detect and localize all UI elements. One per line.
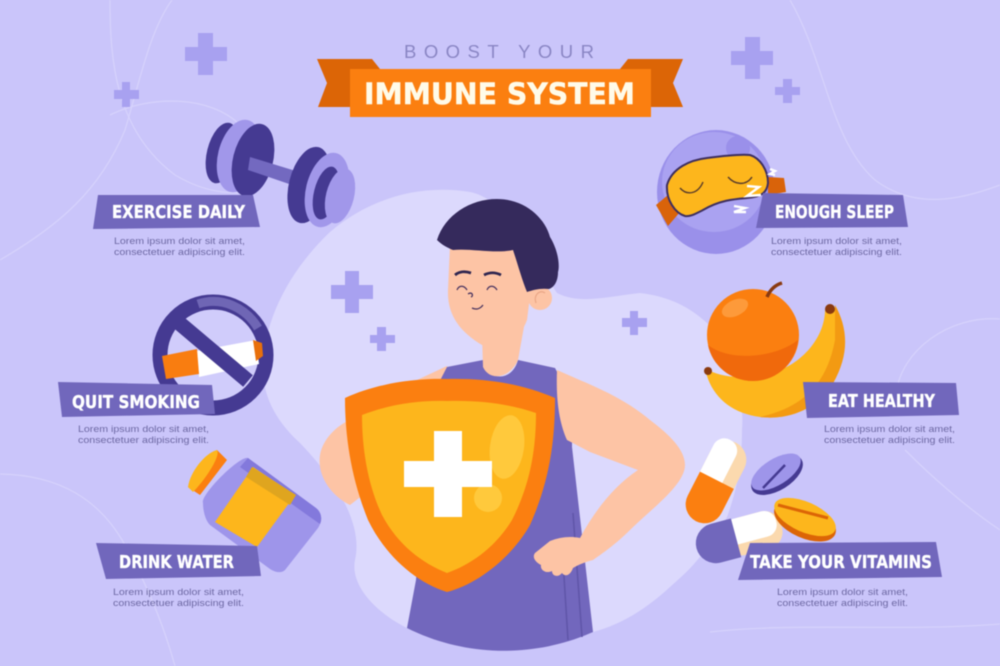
- icon: banana and orange: [704, 283, 845, 418]
- description: Lorem ipsum dolor sit amet,: [113, 586, 244, 597]
- ear: [528, 286, 552, 310]
- label banner: [803, 382, 959, 418]
- panel: take your vitamins: [738, 542, 942, 608]
- label banner: [96, 543, 261, 579]
- panel: exercise daily: [93, 195, 260, 257]
- heading: immune system: IMMUNE SYSTEM: [364, 77, 635, 111]
- description: Lorem ipsum dolor sit amet,: [824, 423, 955, 434]
- icon: water bottle: [188, 450, 321, 572]
- icon: no smoking: [160, 301, 266, 408]
- description: consectetuer adipiscing elit.: [114, 246, 245, 257]
- description: [78, 423, 209, 445]
- panel: eat healthy: [803, 382, 959, 445]
- description: [114, 235, 245, 257]
- shield face: [362, 401, 536, 573]
- ribbon band: [350, 69, 651, 117]
- label banner: [58, 382, 215, 417]
- shield cross: [404, 431, 492, 517]
- label banner: [93, 195, 260, 229]
- description: [771, 235, 902, 257]
- left arm: [320, 366, 460, 505]
- icon: vitamin pills: [679, 434, 842, 568]
- shield rim: [345, 379, 555, 592]
- description: consectetuer adipiscing elit.: [824, 434, 955, 445]
- label text: EAT HEALTHY: [828, 391, 936, 412]
- description: [777, 586, 908, 608]
- panel: quit smoking: [58, 382, 215, 445]
- face: [448, 235, 532, 346]
- label text: DRINK WATER: [119, 552, 234, 573]
- neck: [482, 310, 527, 376]
- description: consectetuer adipiscing elit.: [113, 597, 244, 608]
- label banner: [756, 193, 908, 228]
- description: [113, 586, 244, 608]
- decorative plus icons: [114, 33, 800, 351]
- description: Lorem ipsum dolor sit amet,: [114, 235, 245, 246]
- icon: dumbbell: [200, 115, 360, 232]
- panel: enough sleep: [756, 193, 908, 257]
- label text: ENOUGH SLEEP: [775, 202, 894, 223]
- ribbon tail right: [620, 59, 683, 107]
- icon: sleep mask: [656, 130, 786, 254]
- label text: QUIT SMOKING: [72, 392, 200, 413]
- description: consectetuer adipiscing elit.: [777, 597, 908, 608]
- description: Lorem ipsum dolor sit amet,: [78, 423, 209, 434]
- subtitle: boost your: BOOST YOUR: [404, 41, 594, 62]
- facial features: [455, 272, 501, 309]
- character: man with shield: [320, 199, 685, 651]
- tank top: [407, 360, 593, 651]
- label banner: [738, 542, 942, 580]
- ribbon tail left: [317, 59, 380, 107]
- shield highlights: [474, 413, 528, 512]
- right arm: [534, 370, 685, 576]
- description: consectetuer adipiscing elit.: [771, 246, 902, 257]
- shield: [345, 379, 555, 592]
- label text: TAKE YOUR VITAMINS: [750, 552, 932, 573]
- shirt fold lines: [562, 513, 582, 640]
- hair: [437, 199, 559, 292]
- description: consectetuer adipiscing elit.: [78, 434, 209, 445]
- description: [824, 423, 955, 445]
- label text: EXERCISE DAILY: [112, 202, 246, 223]
- description: Lorem ipsum dolor sit amet,: [771, 235, 902, 246]
- title: [317, 41, 683, 117]
- background blob: [263, 190, 742, 649]
- panel: drink water: [96, 543, 261, 608]
- description: Lorem ipsum dolor sit amet,: [777, 586, 908, 597]
